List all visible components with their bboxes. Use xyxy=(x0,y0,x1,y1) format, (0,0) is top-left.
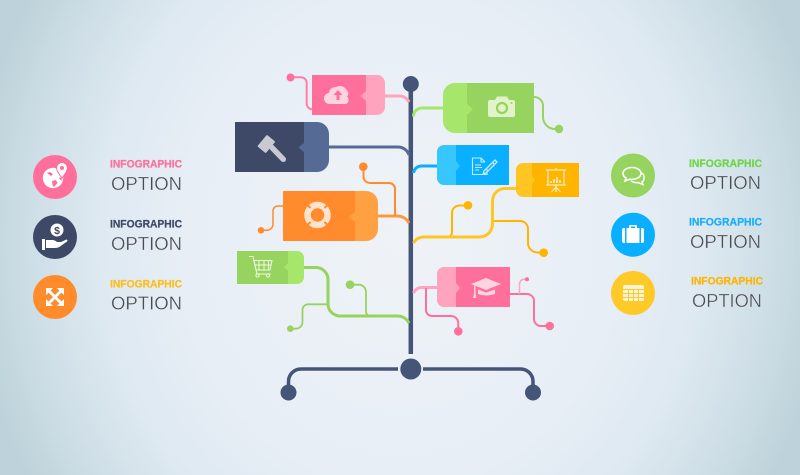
option: blue briefcase xyxy=(611,213,762,257)
heading: INFOGRAPHIC: INFOGRAPHIC xyxy=(110,219,182,231)
icon: presentation board xyxy=(546,168,566,192)
icon: document and pen xyxy=(472,158,497,174)
tag: document and pen xyxy=(414,145,509,185)
text: OPTION: OPTION xyxy=(690,172,761,193)
icon: table grid xyxy=(611,271,655,315)
icon: briefcase xyxy=(611,213,655,257)
icon: hand with coin xyxy=(33,215,77,259)
text: OPTION: OPTION xyxy=(690,231,761,252)
icon: camera xyxy=(488,96,515,117)
text: OPTION: OPTION xyxy=(692,290,762,311)
tag: lifebuoy xyxy=(258,162,409,241)
icon: cloud upload xyxy=(324,86,349,104)
icon: hand with coin: $ xyxy=(54,225,60,237)
tag: camera xyxy=(414,83,563,133)
text: OPTION: OPTION xyxy=(111,233,182,254)
icon: globe and pin xyxy=(33,155,77,199)
icon: gavel xyxy=(257,135,283,159)
icon: chat bubbles xyxy=(611,154,655,198)
trunk and base of the tree xyxy=(280,76,541,400)
text: OPTION: OPTION xyxy=(111,293,182,314)
tag: graduation cap xyxy=(414,267,554,336)
option: pink globe xyxy=(33,155,182,199)
text: OPTION: OPTION xyxy=(111,173,182,194)
option: orange expand xyxy=(33,275,182,319)
tag: presentation board xyxy=(414,163,579,257)
option: green chat xyxy=(611,154,762,198)
option: navy money hand xyxy=(33,215,182,259)
icon: graduation cap xyxy=(471,278,501,298)
icon: lifebuoy xyxy=(306,204,329,226)
tag: shopping cart xyxy=(237,251,409,332)
option: yellow table xyxy=(611,271,763,315)
heading: INFOGRAPHIC: INFOGRAPHIC xyxy=(110,159,182,171)
heading: INFOGRAPHIC: INFOGRAPHIC xyxy=(110,279,182,291)
tag: cloud upload xyxy=(286,74,409,115)
icon: shopping cart xyxy=(249,256,272,277)
heading: INFOGRAPHIC: INFOGRAPHIC xyxy=(689,216,762,228)
icon: expand arrows xyxy=(33,275,77,319)
heading: INFOGRAPHIC: INFOGRAPHIC xyxy=(689,158,762,170)
heading: INFOGRAPHIC: INFOGRAPHIC xyxy=(691,275,763,287)
tag: gavel xyxy=(235,122,409,172)
